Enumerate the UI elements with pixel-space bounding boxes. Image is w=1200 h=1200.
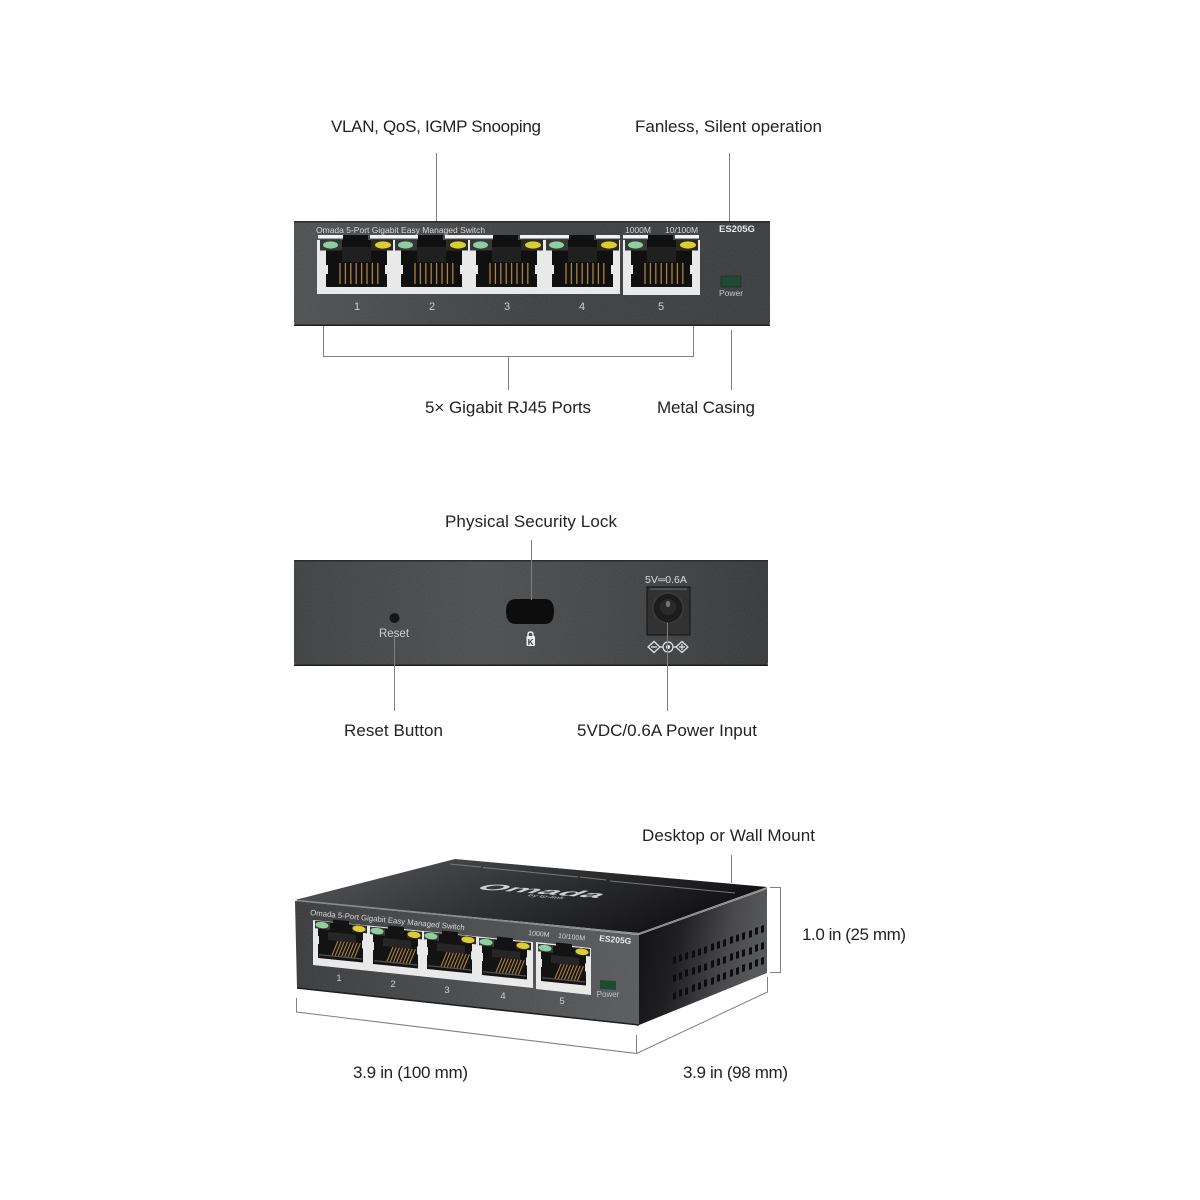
speed labels: 1000M	[528, 930, 550, 939]
icon: polarity symbol	[648, 642, 688, 652]
side vents	[673, 925, 764, 1000]
model name: ES205G	[719, 224, 755, 235]
speed labels: 1000M	[625, 225, 651, 235]
label: VLAN, QoS, IGMP Snooping: VLAN, QoS, IGMP Snooping	[331, 117, 541, 136]
panel: perspective view of switch	[295, 859, 767, 1025]
label: Physical Security Lock: Physical Security Lock	[445, 512, 618, 531]
front face	[295, 901, 639, 1025]
security lock slot	[506, 599, 554, 624]
icon: lock: K	[528, 638, 534, 647]
logo on top: Omada	[469, 882, 615, 900]
leader lines: perspective view	[296, 855, 780, 1054]
ports 1 to 5	[318, 235, 699, 287]
port frame 1-4	[317, 240, 620, 294]
panel: rear view of switch	[294, 560, 768, 666]
rear casing	[294, 560, 768, 666]
port numbers	[354, 301, 664, 313]
port numbers: 5	[559, 996, 565, 1007]
reset hole	[390, 613, 400, 623]
port numbers: 3	[444, 985, 450, 996]
power label: Power	[719, 288, 743, 298]
power LED	[600, 980, 616, 990]
label: 5VDC/0.6A Power Input: 5VDC/0.6A Power Input	[577, 721, 757, 740]
power label: Power	[597, 990, 620, 999]
port numbers: 2	[429, 301, 435, 313]
port numbers	[336, 973, 565, 1007]
port frame 1-4 (skewed)	[313, 920, 533, 988]
port numbers: 1	[354, 301, 360, 313]
reset label: Reset	[379, 628, 410, 640]
power LED	[721, 276, 741, 287]
port frame 5	[623, 240, 700, 295]
voltage label: 5V═0.6A	[645, 574, 687, 586]
label: Reset Button: Reset Button	[344, 721, 443, 740]
model text: Omada 5-Port Gigabit Easy Managed Switch	[316, 225, 485, 235]
ports 1 to 5 (skewed)	[315, 918, 590, 986]
label: Desktop or Wall Mount: Desktop or Wall Mount	[642, 826, 815, 845]
leader lines: rear view	[394, 540, 668, 711]
top back seam	[450, 864, 735, 893]
speed labels	[528, 930, 586, 943]
top edge highlight	[297, 888, 767, 934]
port numbers: 4	[579, 301, 585, 313]
speed labels: 10/100M	[558, 933, 586, 943]
side face	[639, 889, 767, 1025]
speed labels	[625, 225, 698, 235]
logo on top: by tp-link	[526, 894, 566, 900]
model text: Omada 5-Port Gigabit Easy Managed Switch	[310, 908, 465, 932]
port numbers: 5	[658, 301, 664, 313]
label: 3.9 in (100 mm): 3.9 in (100 mm)	[353, 1063, 468, 1082]
port numbers: 1	[336, 973, 342, 984]
label: 1.0 in (25 mm): 1.0 in (25 mm)	[802, 925, 906, 944]
model name: ES205G	[599, 933, 632, 946]
port frame 5 (skewed)	[536, 942, 591, 995]
bottom shadow edge	[297, 988, 639, 1025]
label: Fanless, Silent operation: Fanless, Silent operation	[635, 117, 822, 136]
leader lines: front view	[324, 153, 732, 390]
port numbers: 3	[504, 301, 510, 313]
icon: lock	[526, 632, 535, 647]
port numbers: 4	[500, 991, 506, 1002]
panel: front view of switch	[294, 221, 770, 326]
speed labels: 10/100M	[665, 225, 698, 235]
front casing	[294, 221, 770, 326]
label: 3.9 in (98 mm): 3.9 in (98 mm)	[683, 1063, 788, 1082]
label: Metal Casing: Metal Casing	[657, 398, 755, 417]
port numbers: 2	[390, 979, 396, 990]
power jack	[647, 587, 690, 635]
label: 5x Gigabit RJ45 Ports: 5× Gigabit RJ45 Ports	[425, 398, 591, 417]
top face	[295, 859, 767, 933]
